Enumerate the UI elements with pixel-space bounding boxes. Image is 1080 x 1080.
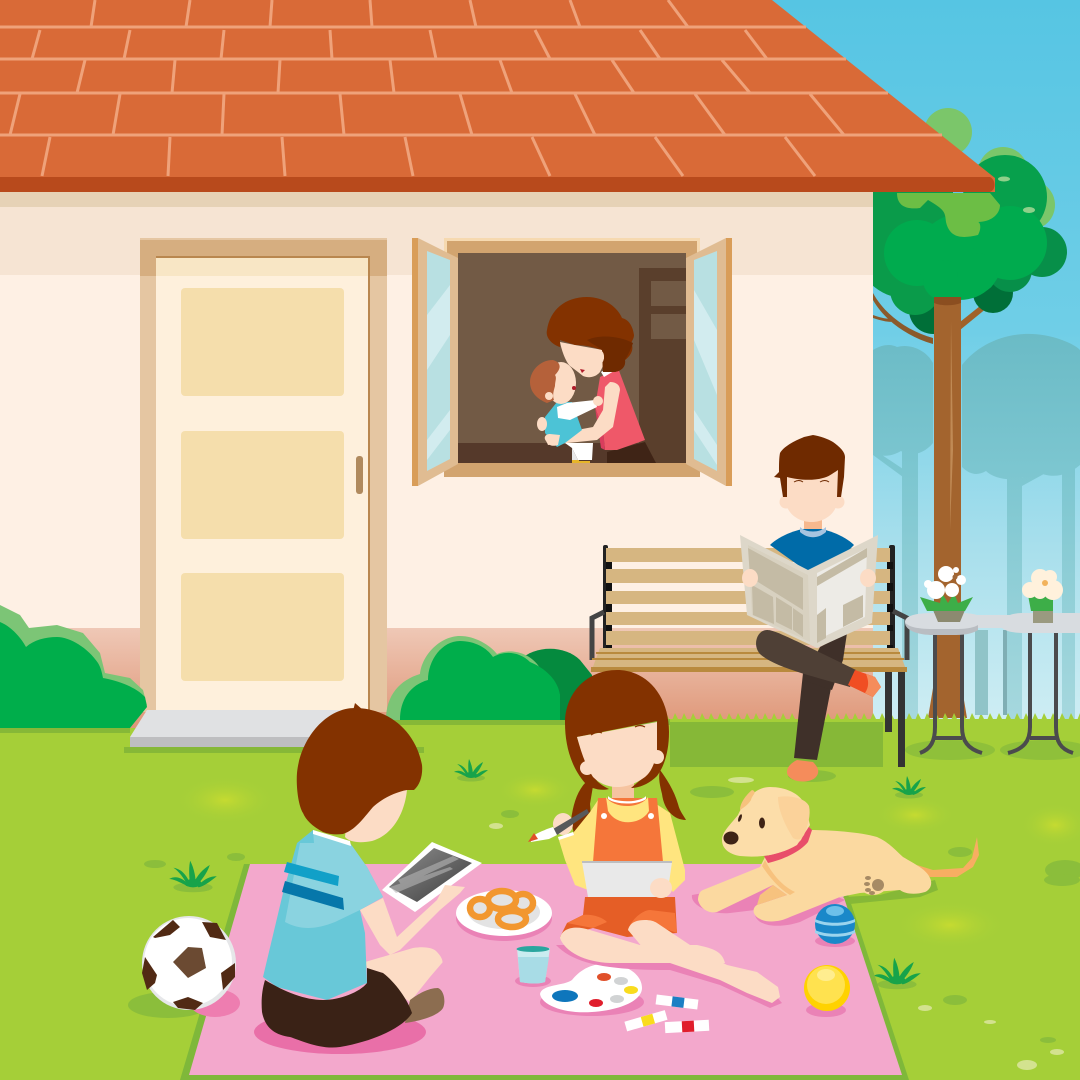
man reading newspaper bbox=[740, 435, 881, 782]
connecting table base bbox=[975, 630, 988, 715]
girl bbox=[528, 670, 782, 1008]
girl legs bbox=[560, 928, 725, 963]
girl hair bbox=[565, 670, 669, 790]
man facial details bbox=[794, 480, 829, 482]
door step bbox=[130, 710, 350, 747]
door frame bbox=[140, 238, 387, 712]
door leaf bbox=[156, 256, 370, 712]
boy arm and hand bbox=[360, 885, 465, 955]
newspaper bbox=[740, 535, 878, 648]
grass tufts bbox=[169, 759, 926, 989]
plate of doughnuts bbox=[456, 890, 552, 941]
glass of water bbox=[515, 946, 551, 987]
right shutter bbox=[686, 238, 732, 486]
girl shorts bbox=[560, 897, 677, 937]
girl neck bbox=[612, 780, 634, 798]
boy shadow bbox=[254, 1010, 426, 1054]
dog shadows bbox=[843, 880, 938, 904]
dog face features bbox=[724, 832, 738, 844]
man hair bbox=[774, 435, 845, 497]
girl facial details bbox=[591, 726, 645, 735]
dog tail bbox=[917, 837, 979, 877]
left shutter bbox=[412, 238, 458, 486]
paint brush bbox=[528, 809, 589, 842]
bench seat bbox=[591, 648, 907, 672]
girl overalls bib bbox=[593, 798, 663, 862]
cream flower pot bbox=[1022, 569, 1063, 623]
door panels bbox=[181, 288, 344, 681]
man hands bbox=[742, 569, 758, 587]
girl face bbox=[577, 722, 657, 787]
tree branches bbox=[873, 293, 933, 344]
dog paw bbox=[859, 873, 887, 895]
flower pots bbox=[920, 566, 1063, 623]
boy tablet bbox=[382, 842, 482, 912]
white flower pot bbox=[920, 566, 973, 622]
man shoes bbox=[848, 670, 881, 697]
table tops bbox=[905, 613, 1080, 633]
man ears and face bbox=[780, 496, 792, 508]
boy shoe bbox=[405, 988, 444, 1023]
tree trunk bbox=[928, 297, 967, 718]
house wall bbox=[0, 190, 873, 730]
grass bbox=[0, 713, 1080, 1080]
boy neck and face bbox=[345, 790, 407, 842]
middle bush bbox=[386, 636, 592, 720]
picnic blanket bbox=[180, 864, 909, 1080]
paint palette bbox=[540, 964, 644, 1016]
door handle bbox=[356, 456, 363, 494]
girl hand bbox=[650, 878, 672, 898]
man trousers bbox=[794, 673, 832, 760]
roof bbox=[0, 0, 995, 192]
boy shirt bbox=[263, 830, 383, 1000]
girl shadow bbox=[556, 945, 782, 1008]
table legs bbox=[920, 632, 1073, 753]
baby bbox=[530, 360, 603, 463]
blue ball toy bbox=[815, 904, 855, 947]
tree bbox=[857, 108, 1067, 718]
window sill bbox=[444, 463, 700, 477]
dog ear bbox=[778, 796, 810, 840]
man shirt bbox=[770, 528, 854, 575]
boy bbox=[254, 703, 482, 1054]
soccer ball bbox=[128, 916, 240, 1018]
girl braids bbox=[571, 782, 593, 844]
boy leg bbox=[365, 947, 442, 1002]
boy hair bbox=[297, 708, 422, 834]
tree canopy bbox=[857, 108, 1067, 334]
bench slats bbox=[606, 548, 890, 645]
dog body bbox=[698, 830, 931, 921]
bench back uprights bbox=[603, 545, 608, 667]
girl sleeves bbox=[558, 800, 600, 890]
bench armrests bbox=[592, 611, 907, 660]
boy shorts bbox=[262, 968, 412, 1048]
bench bbox=[591, 545, 907, 767]
sky bbox=[770, 0, 1080, 730]
mother bbox=[545, 297, 656, 463]
garden tables bbox=[905, 613, 1080, 760]
paint tubes bbox=[624, 994, 709, 1033]
yellow ball bbox=[804, 965, 850, 1017]
girl ears bbox=[580, 761, 594, 775]
window bbox=[412, 238, 732, 486]
dog bbox=[692, 787, 979, 926]
left bush bbox=[0, 605, 147, 728]
door bbox=[140, 238, 387, 712]
background forest silhouettes bbox=[873, 334, 1080, 720]
window frame bbox=[444, 238, 700, 476]
girl tablet bbox=[582, 861, 672, 897]
dog collar bbox=[764, 826, 812, 863]
window interior bbox=[458, 253, 686, 464]
table shadows bbox=[905, 740, 995, 760]
bench legs bbox=[885, 672, 892, 732]
dog head bbox=[722, 787, 810, 857]
